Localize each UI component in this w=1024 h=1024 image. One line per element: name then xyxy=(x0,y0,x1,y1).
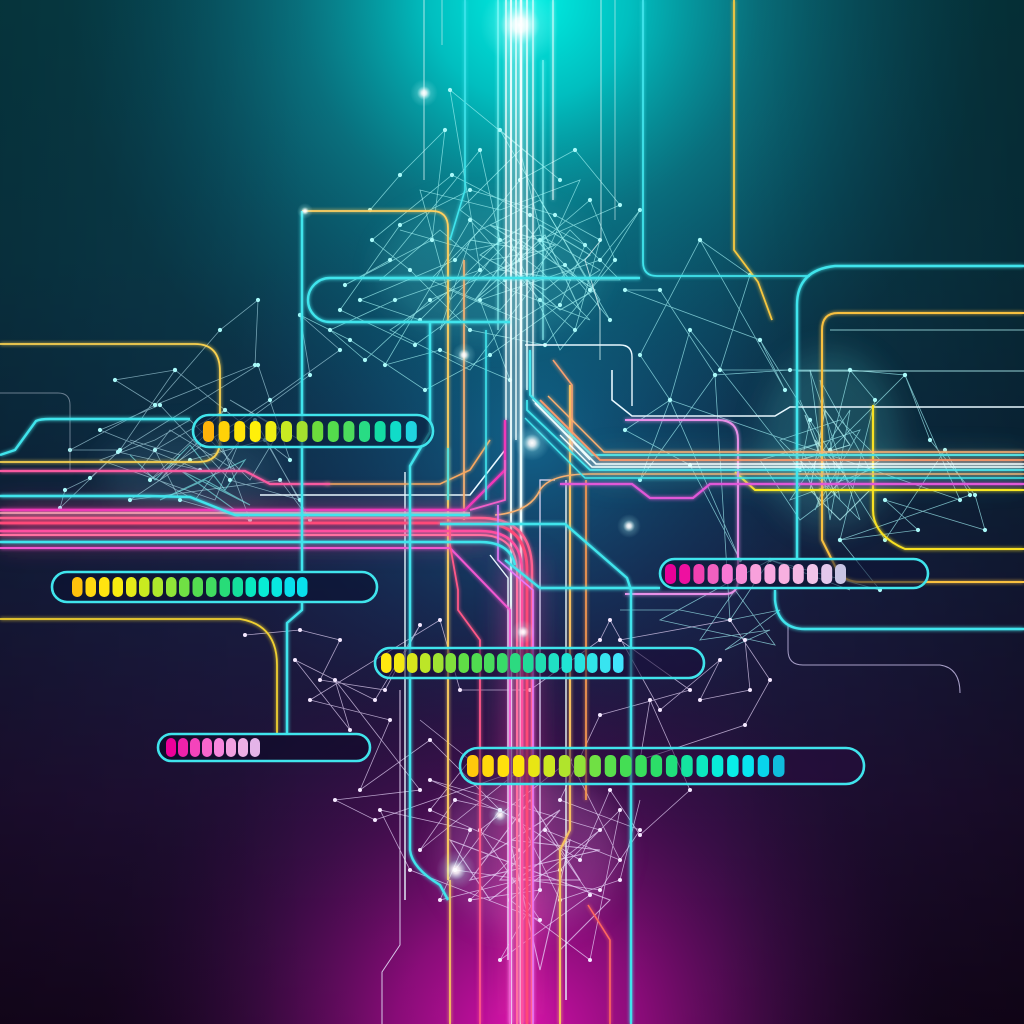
progress bar: centre xyxy=(375,648,704,678)
progress bar: bottom xyxy=(460,748,864,784)
circuit traces: pink and magenta xyxy=(0,420,1024,1024)
network mesh: upper centre cluster xyxy=(300,90,640,390)
progress bar: upper left xyxy=(193,415,433,447)
progress bar: right xyxy=(660,559,928,588)
network mesh: left cluster xyxy=(60,300,340,520)
light flares xyxy=(297,0,641,890)
network mesh: lower cluster xyxy=(245,620,770,970)
progress bar: middle left xyxy=(52,572,377,602)
progress bar: lower left xyxy=(158,734,370,761)
circuit traces: central white beam xyxy=(498,0,590,1024)
network mesh: right cluster xyxy=(620,240,985,650)
right bus bundle xyxy=(535,396,1024,467)
